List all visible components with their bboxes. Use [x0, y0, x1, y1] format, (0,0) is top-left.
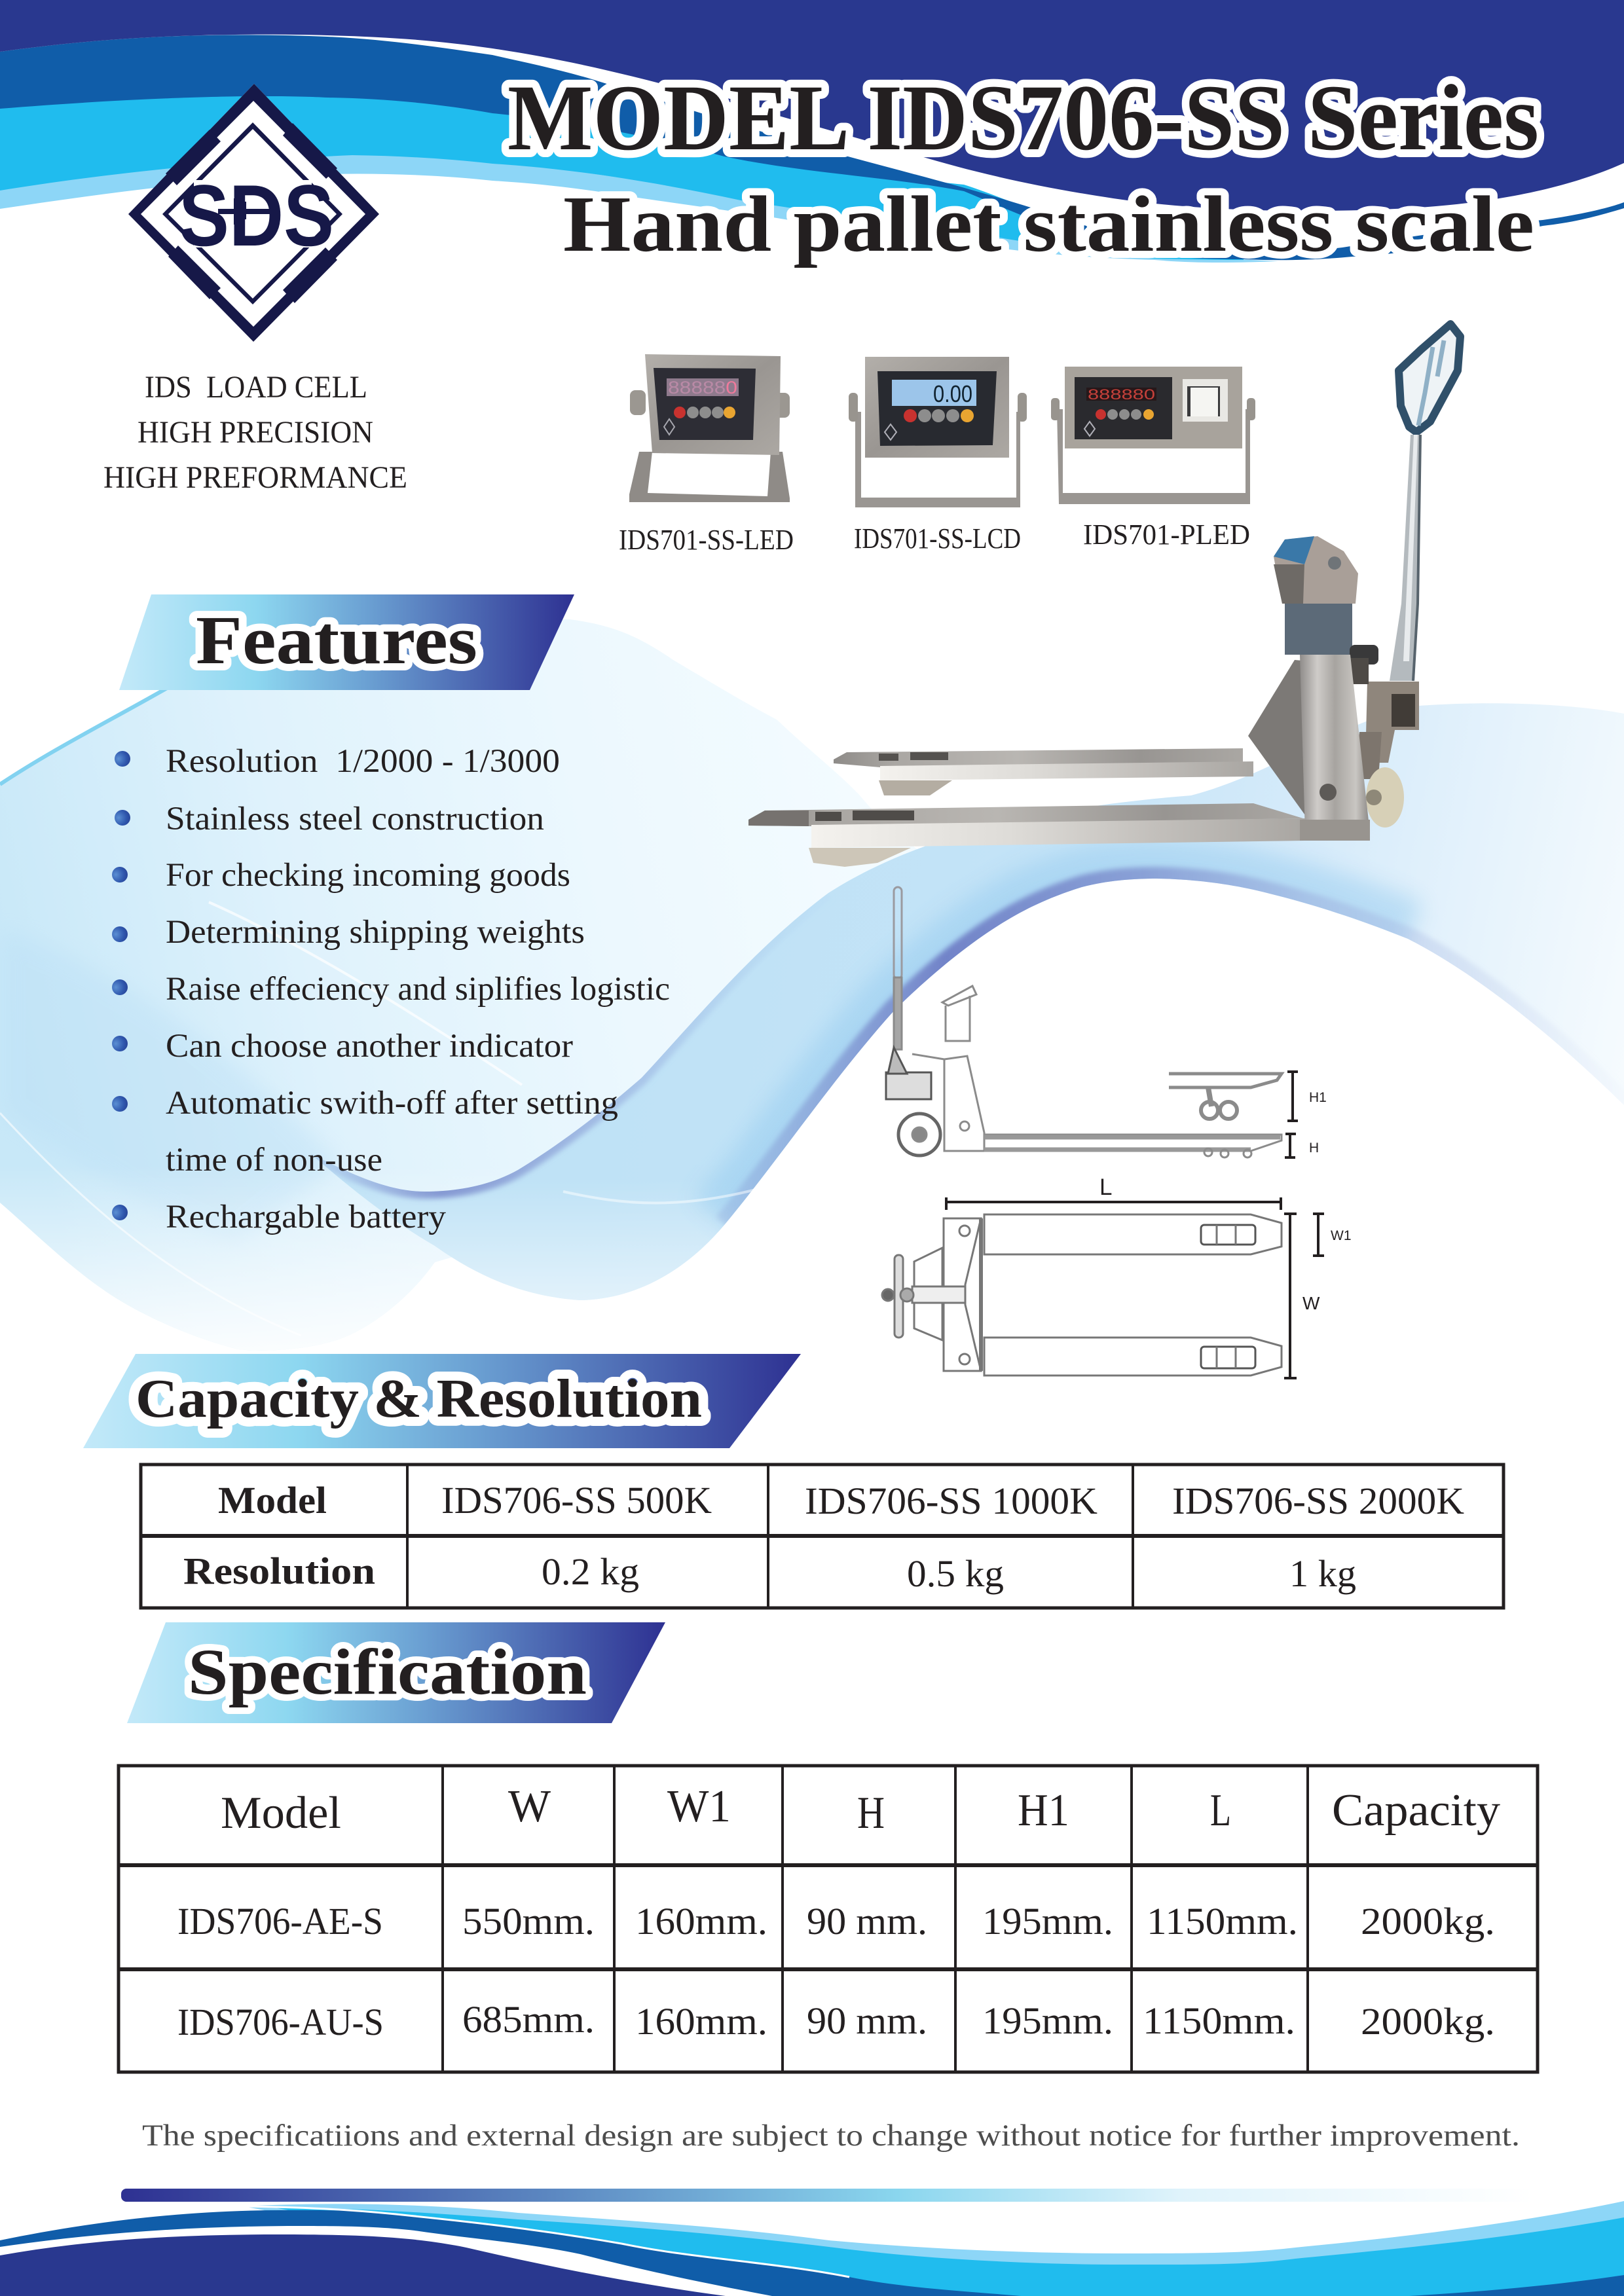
- capacity table text: 0.5 kg: [907, 1552, 1004, 1595]
- feature text: [166, 743, 670, 1235]
- column: [1285, 604, 1352, 655]
- capacity table text: IDS706-SS 500K: [441, 1479, 712, 1522]
- dimension labels: [1099, 1090, 1352, 1313]
- truck shaft: [1390, 435, 1421, 681]
- truck steer wheel: [1366, 767, 1404, 828]
- feature text: For checking incoming goods: [166, 857, 570, 894]
- header waves: [0, 0, 1624, 263]
- back fork rollers: [879, 780, 952, 795]
- features list: [112, 743, 670, 1235]
- specification heading: Specification: [188, 1635, 587, 1708]
- logo letters: SDS: [179, 168, 334, 264]
- background: flowing light blue ribbons: [0, 619, 1624, 1351]
- tagline text: IDS LOAD CELL: [145, 370, 367, 405]
- top view fork 1: [984, 1214, 1282, 1254]
- side view raised fork: [1169, 1074, 1282, 1087]
- dark knob: [1336, 645, 1378, 684]
- W marker: [1284, 1214, 1297, 1378]
- tagline text: [103, 370, 407, 495]
- indicator: IDS701-SS-LED: 88888 0: [668, 378, 737, 397]
- stainless hand pallet truck photo illustration: [748, 324, 1460, 867]
- dimension labels: L: [1099, 1175, 1112, 1200]
- specification row IDS706-AU-S: 1150mm.: [1143, 1999, 1295, 2042]
- dimension markers: [946, 1072, 1324, 1378]
- H marker: [1285, 1134, 1296, 1157]
- top view frame: [944, 1218, 981, 1371]
- capacity table text: IDS706-SS 1000K: [805, 1480, 1098, 1522]
- side view handle: [894, 887, 902, 979]
- feature text: Rechargable battery: [166, 1199, 447, 1235]
- specification row IDS706-AE-S: 1150mm.: [1147, 1900, 1298, 1942]
- dimension labels: H1: [1309, 1090, 1327, 1105]
- specification table header: H: [857, 1788, 885, 1838]
- capacity table text: Resolution: [183, 1550, 375, 1592]
- specification table header: Model: [221, 1788, 341, 1838]
- capacity table text: 1 kg: [1289, 1552, 1356, 1595]
- capacity table text: [183, 1479, 1464, 1595]
- truck main frame: [1248, 655, 1370, 833]
- specification row IDS706-AU-S: 90 mm.: [807, 1999, 927, 2042]
- dimension drawing: top view: [882, 1214, 1282, 1376]
- indicator labels: IDS701-SS-LED: [619, 524, 794, 556]
- specification table header: W: [508, 1781, 551, 1832]
- indicator labels: [619, 519, 1250, 556]
- truck handle: [1399, 324, 1460, 432]
- bullets: [112, 751, 130, 1220]
- capacity table text: Model: [218, 1479, 327, 1522]
- capacity table text: IDS706-SS 2000K: [1172, 1480, 1464, 1522]
- specification row IDS706-AE-S: [177, 1900, 1495, 1942]
- specification table header: [221, 1781, 1500, 1838]
- specification row IDS706-AE-S: 550mm.: [462, 1900, 595, 1942]
- side view indicator: [942, 986, 976, 1041]
- front fork rollers: [809, 848, 911, 867]
- tagline text: HIGH PRECISION: [138, 415, 373, 450]
- indicator: IDS701-SS-LCD: 0.00: [933, 380, 972, 407]
- specification table header: Capacity: [1332, 1785, 1500, 1836]
- specification row IDS706-AE-S: 160mm.: [635, 1900, 767, 1942]
- logo: SDS diamond: [128, 84, 379, 342]
- specification table header: L: [1210, 1785, 1231, 1836]
- specification table header: H1: [1018, 1785, 1069, 1836]
- side view wheel: [898, 1114, 940, 1156]
- specification row IDS706-AE-S: 90 mm.: [807, 1900, 927, 1942]
- specification table header: W1: [667, 1781, 731, 1832]
- capacity heading: Capacity & Resolution: [136, 1368, 702, 1429]
- specification row IDS706-AE-S: 2000kg.: [1361, 1900, 1495, 1942]
- feature text: time of non-use: [166, 1142, 382, 1178]
- specification row IDS706-AE-S: 195mm.: [982, 1900, 1113, 1942]
- specification row IDS706-AU-S: 160mm.: [635, 2000, 767, 2043]
- features heading: Features: [196, 602, 477, 678]
- scale head: [1274, 536, 1358, 604]
- title line 1: MODEL IDS706-SS Series: [507, 66, 1539, 170]
- footer note: The specificatiions and external design are subject to change without notice for further improvement.: [142, 2119, 1520, 2153]
- indicator: IDS701-SS-LCD: [849, 357, 1027, 507]
- L marker: [946, 1197, 1281, 1210]
- logo centre mark: [218, 198, 270, 225]
- specification table: [119, 1766, 1538, 2072]
- footer waves: [0, 2201, 1624, 2296]
- specification row IDS706-AU-S: [177, 1998, 1495, 2043]
- specification row IDS706-AU-S: 685mm.: [462, 1998, 595, 2041]
- feature text: Resolution 1/2000 - 1/3000: [166, 743, 560, 780]
- specification row IDS706-AE-S: IDS706-AE-S: [177, 1900, 383, 1942]
- title: [507, 66, 1539, 268]
- side view lower fork: [984, 1135, 1282, 1151]
- capacity banner: [83, 1354, 801, 1448]
- capacity table grid: [141, 1465, 1504, 1608]
- specification table grid: [119, 1766, 1538, 2072]
- gradient divider bar: [121, 2189, 1532, 2202]
- indicator labels: IDS701-PLED: [1083, 519, 1250, 551]
- front fork: [748, 803, 1370, 848]
- indicator labels: IDS701-SS-LCD: [854, 522, 1021, 555]
- indicator: IDS701-PLED: 888880: [1088, 386, 1155, 403]
- specification row IDS706-AU-S: 2000kg.: [1361, 2000, 1495, 2043]
- top view body and link: [914, 1248, 942, 1340]
- back fork: [834, 748, 1253, 780]
- top view fork 2: [984, 1338, 1282, 1376]
- H1 marker: [1287, 1072, 1298, 1121]
- feature text: Raise effeciency and siplifies logistic: [166, 971, 670, 1008]
- feature text: Can choose another indicator: [166, 1028, 573, 1065]
- feature text: Automatic swith-off after setting: [166, 1085, 618, 1121]
- features banner: [119, 594, 574, 690]
- specification row IDS706-AU-S: 195mm.: [982, 1999, 1113, 2042]
- indicator: IDS701-PLED: [1051, 367, 1255, 504]
- specification row IDS706-AU-S: IDS706-AU-S: [177, 2001, 384, 2043]
- feature text: Determining shipping weights: [166, 914, 585, 951]
- indicator: IDS701-SS-LED: [629, 354, 790, 502]
- dimension labels: H: [1309, 1140, 1319, 1156]
- dimension labels: W: [1302, 1293, 1320, 1313]
- tagline text: HIGH PREFORMANCE: [103, 460, 407, 495]
- capacity table text: 0.2 kg: [542, 1550, 639, 1593]
- dimension labels: W1: [1331, 1228, 1352, 1243]
- hydraulic block: [1356, 682, 1419, 779]
- side view frame: [912, 1054, 984, 1151]
- title line 2: Hand pallet stainless scale: [563, 180, 1534, 268]
- dimension drawing: side view: [886, 887, 1282, 1157]
- feature text: Stainless steel construction: [166, 801, 544, 837]
- W1 marker: [1313, 1214, 1324, 1256]
- capacity table: [141, 1465, 1504, 1608]
- specification banner: [127, 1622, 665, 1723]
